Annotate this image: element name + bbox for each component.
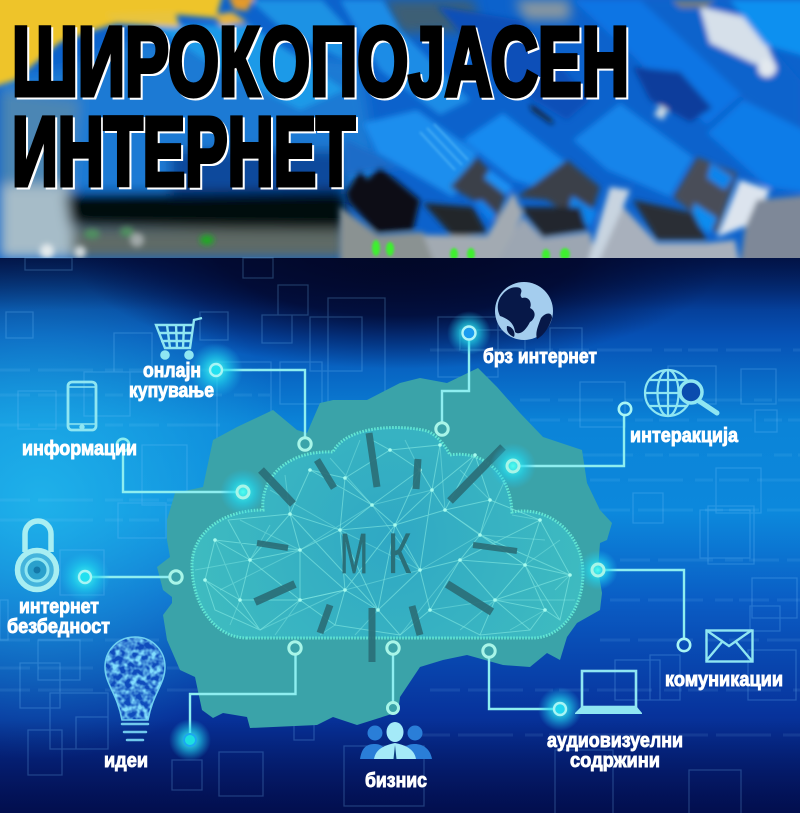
icon: light bulb — [104, 636, 166, 742]
text: M: М — [340, 522, 368, 586]
panel: map of North Macedonia — [157, 368, 612, 728]
connector: communications — [578, 550, 690, 651]
connector: ideas — [169, 642, 301, 761]
bulb outline — [105, 637, 165, 720]
connector: internet security — [60, 552, 182, 602]
bulb base — [122, 724, 148, 740]
label: communications: комуникации — [665, 669, 783, 691]
panel: header photo of blue network cables — [0, 0, 800, 265]
icon: green status LEDs — [372, 240, 570, 261]
connector: fast internet — [436, 311, 491, 435]
icon: smartphone — [68, 382, 96, 430]
icon: world globe — [495, 282, 553, 340]
decorative ribs on connector — [420, 124, 468, 170]
icon: shopping cart — [156, 318, 202, 359]
label: online shopping line 2: купување — [129, 380, 214, 402]
labels — [7, 346, 783, 792]
label: information: информации — [22, 438, 137, 460]
label: business: бизнис — [365, 770, 427, 792]
text: K: К — [388, 522, 411, 586]
label: interaction: интеракција — [630, 425, 739, 447]
panel: cloud with network mesh — [192, 428, 583, 662]
icon: envelope — [706, 630, 752, 662]
label: audiovisual line 1: аудиовизуелни — [547, 730, 683, 752]
icon: globe with magnifying glass — [645, 370, 717, 416]
panel: digital network background — [0, 258, 800, 813]
icon: business people — [360, 722, 432, 759]
title shadow line 2: ИНТЕРНЕТ — [14, 99, 357, 208]
connector: online shopping — [189, 343, 311, 450]
label: online shopping: онлајн — [143, 360, 201, 382]
title — [12, 7, 631, 208]
label: internet security line 1: интернет — [19, 596, 99, 618]
connector: audiovisual — [483, 645, 582, 731]
label: fast internet: брз интернет — [483, 346, 597, 368]
label: internet security line 2: безбедност — [7, 616, 110, 638]
icon: padlock — [18, 521, 56, 590]
connector: interaction — [490, 403, 631, 489]
connector: business — [387, 642, 399, 714]
icon: laptop — [575, 671, 642, 714]
label: audiovisual line 2: содржини — [570, 750, 660, 772]
bulb mosaic texture — [106, 638, 164, 720]
cloud shape — [192, 428, 583, 638]
radial dark bars — [255, 433, 517, 662]
connector: information — [117, 439, 266, 515]
label: ideas: идеи — [104, 750, 148, 772]
title line 2: ИНТЕРНЕТ — [12, 97, 355, 206]
mesh nodes — [203, 443, 572, 612]
network mesh — [195, 440, 575, 635]
